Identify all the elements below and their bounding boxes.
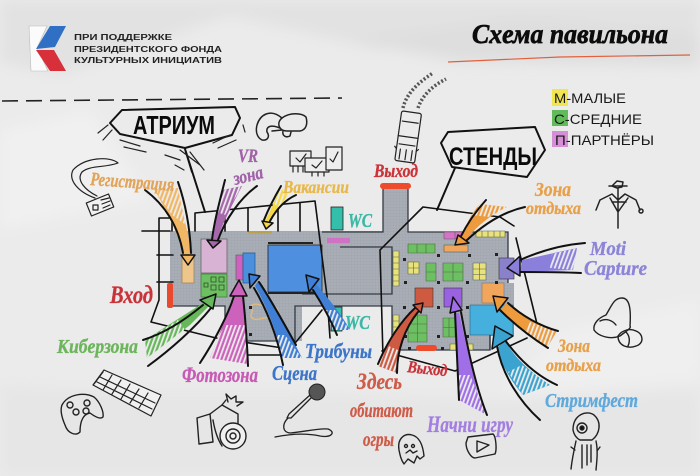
label: vr zone: VR <box>238 146 258 167</box>
logo: foundation emblem <box>29 26 66 71</box>
label: vr zone <box>230 146 266 190</box>
icon: keyboard <box>93 370 161 416</box>
label: moti capture: Moti <box>589 238 626 260</box>
label: moti capture <box>584 238 647 280</box>
label: registration: Регистрация <box>89 169 175 196</box>
arrow: start the game <box>450 297 487 415</box>
legend: stand sizes: М-МАЛЫЕ <box>554 90 626 106</box>
label: ogres live here: огры <box>363 429 394 451</box>
plan: stage cable <box>250 304 278 319</box>
callout: stands: СТЕНДЫ <box>449 143 537 171</box>
floor plan <box>142 183 538 371</box>
arrow: moti capture <box>507 243 585 276</box>
label: exit bottom: Выход <box>406 357 449 380</box>
icon: camera <box>197 394 246 449</box>
icon: microphone <box>275 384 332 437</box>
arrow: cyber zone <box>143 294 216 366</box>
wc labels: WC <box>345 312 371 334</box>
callout: stands <box>437 127 545 210</box>
arrow: tribunes <box>306 275 350 335</box>
plan: exit bar top <box>380 183 411 189</box>
label: exit top: Выход <box>373 161 418 182</box>
label: entrance: Вход <box>109 282 153 309</box>
plan: stands <box>393 231 514 351</box>
logo caption <box>74 32 222 65</box>
label: rest zone lower: Зона <box>557 336 590 357</box>
arrow: registration <box>145 182 195 265</box>
label: ogres live here: обитают <box>350 400 413 422</box>
arrow: rest zone lower <box>493 296 558 348</box>
label: vacancies: Вакансии <box>282 177 349 197</box>
label: rest zone lower: отдыха <box>546 355 601 375</box>
title: Схема павильона <box>472 19 668 49</box>
label: vr zone: зона <box>230 162 266 190</box>
icon: stream monster <box>571 413 600 470</box>
callout: atrium <box>98 107 245 212</box>
plan: columns <box>249 253 498 350</box>
logo caption: КУЛЬТУРНЫХ ИНИЦИАТИВ <box>74 55 222 65</box>
label: stage: Сцена <box>272 361 317 385</box>
plan: building outline <box>142 201 538 371</box>
label: tribunes: Трибуны <box>305 339 372 363</box>
icon: job screens <box>290 147 342 176</box>
label: ogres live here: Здесь <box>356 369 402 394</box>
dashed separator <box>2 98 342 101</box>
label: ogres live here <box>350 369 413 451</box>
arrow: stream fest <box>492 326 557 420</box>
icon: lanyard and badge <box>72 159 118 216</box>
arrow: vr zone <box>207 180 257 248</box>
label: photo zone: Фотозона <box>182 362 258 387</box>
icon: play button <box>466 434 496 458</box>
plan: grey floor <box>170 189 514 350</box>
label: rest zone lower <box>546 336 601 375</box>
title underline <box>448 55 690 62</box>
label: stream fest: Стримфест <box>545 390 638 412</box>
legend: stand sizes: С-СРЕДНИЕ <box>554 111 642 127</box>
legend: stand sizes: П-ПАРТНЁРЫ <box>555 132 654 148</box>
icon: bean bag <box>594 298 642 347</box>
arrow: stage <box>249 274 302 365</box>
label: start the game: Начни игру <box>426 412 514 437</box>
logo caption: ПРИ ПОДДЕРЖКЕ <box>74 32 172 42</box>
icon: car with tracks <box>393 73 446 163</box>
label: moti capture: Capture <box>584 256 647 280</box>
icon: scarecrow robot <box>596 181 643 228</box>
legend: stand sizes <box>552 89 654 148</box>
label: cyber zone: Киберзона <box>56 336 138 358</box>
wc labels <box>345 210 373 334</box>
plan: hall walls <box>170 189 513 350</box>
label: rest zone upper: Зона <box>534 179 571 201</box>
logo caption: ПРЕЗИДЕНТСКОГО ФОНДА <box>74 44 222 54</box>
arrow: ogres zone <box>378 303 423 373</box>
teal wc block lower <box>331 307 342 331</box>
plan: atrium blocks <box>167 207 350 308</box>
arrow: rest zone upper <box>455 200 525 245</box>
icon: vr headset <box>256 113 307 140</box>
label: rest zone upper <box>526 179 581 218</box>
arrow: photo zone <box>200 280 250 366</box>
arrow: vacancies <box>262 186 296 229</box>
icon: gamepad <box>61 394 103 434</box>
label: rest zone upper: отдыха <box>526 198 581 218</box>
callout: atrium: АТРИУМ <box>133 110 215 140</box>
wc labels: WC <box>348 210 373 232</box>
icon: ghost <box>399 435 424 464</box>
